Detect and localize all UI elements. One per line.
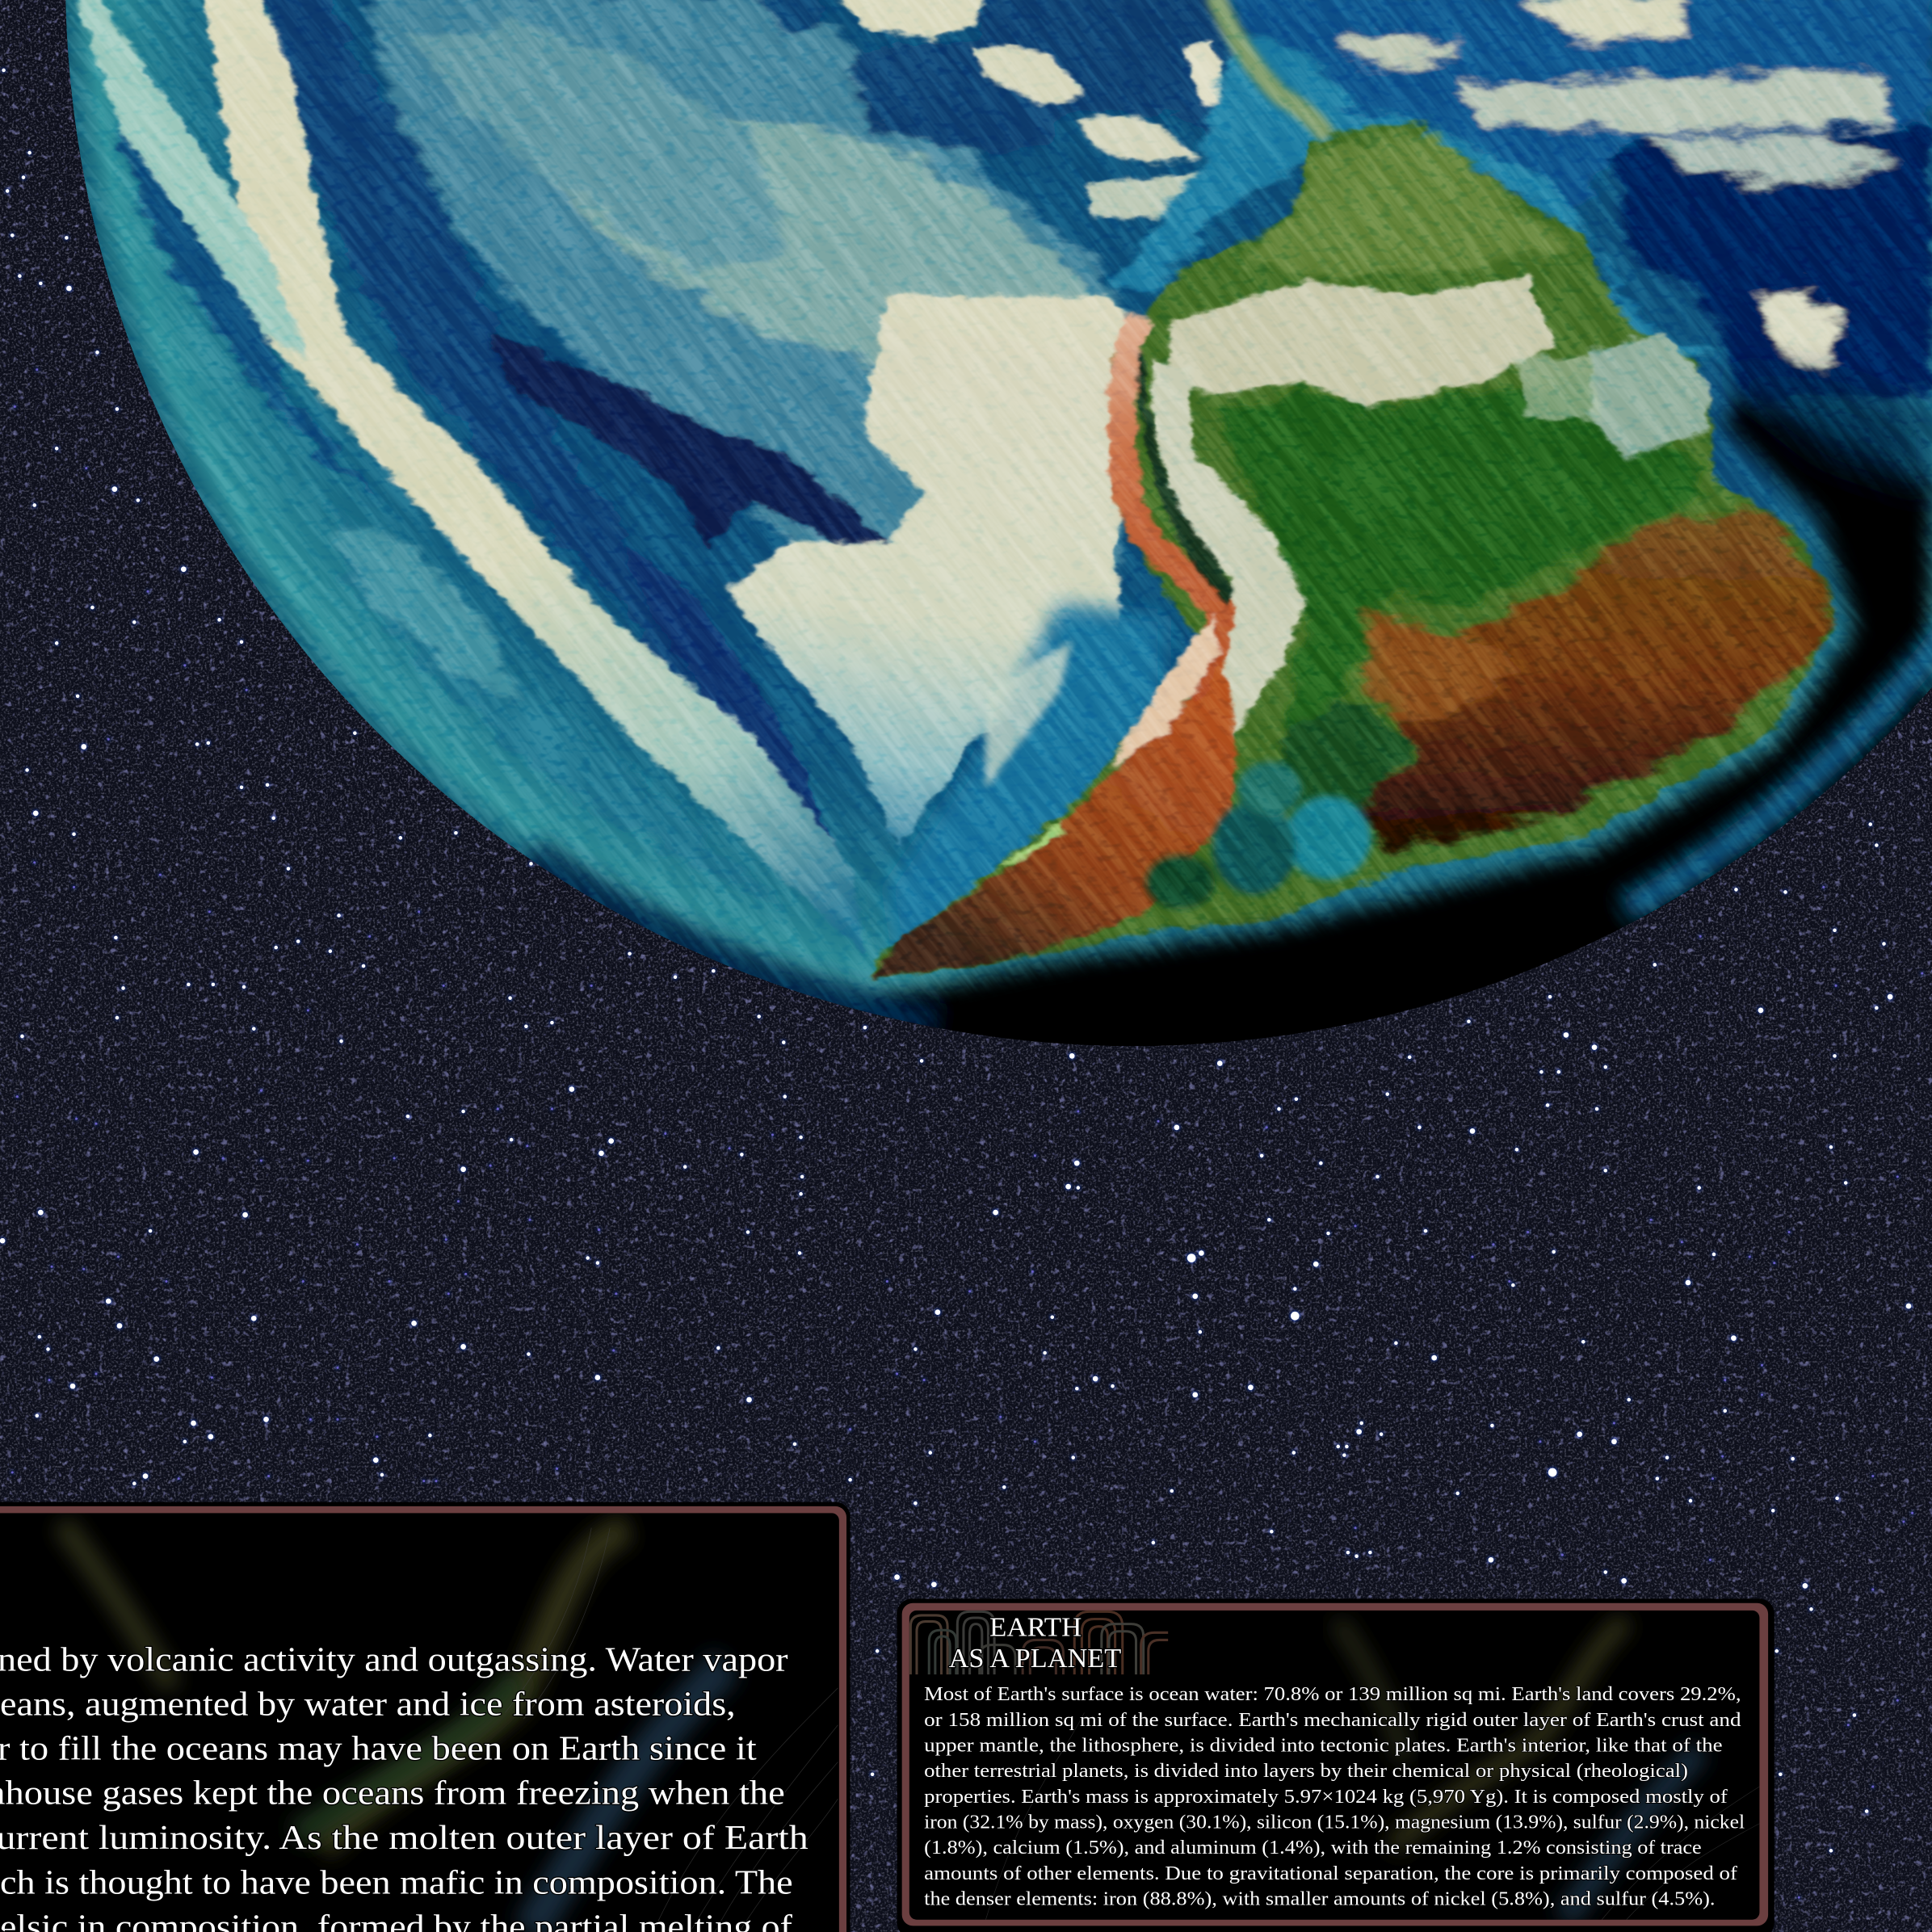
paragraph text: r to fill the oceans may have been on Earth since it — [0, 1730, 757, 1767]
panel: Earth as a planet — [897, 1598, 1774, 1932]
body text: amounts of other elements. Due to gravitational separation, the core is primarily composed of — [924, 1863, 1737, 1884]
paragraph text: ned by volcanic activity and outgassing. Water vapor — [0, 1642, 788, 1679]
lakes and teal blobs — [1146, 762, 1371, 909]
heading: EARTH — [989, 1611, 1082, 1642]
heading — [949, 1611, 1121, 1674]
heading: AS A PLANET — [949, 1643, 1121, 1674]
cream cloud swaths — [74, 0, 1233, 955]
Earth globe — [65, 0, 1932, 1046]
body text: iron (32.1% by mass), oxygen (30.1%), silicon (15.1%), magnesium (13.9%), sulfur (2.9%), nickel — [924, 1812, 1745, 1833]
paragraph text — [0, 1642, 808, 1932]
Central America — [1214, 0, 1328, 138]
body text: or 158 million sq mi of the surface. Earth's mechanically rigid outer layer of Earth's crust and — [924, 1710, 1741, 1731]
dark swirl — [488, 333, 890, 842]
clouds over the continent — [1152, 274, 1710, 739]
panel: early Earth text — [0, 1502, 850, 1932]
South America — [530, 124, 1932, 1109]
body text: (1.8%), calcium (1.5%), and aluminum (1.4%), with the remaining 1.2% consisting of trace — [924, 1838, 1702, 1858]
night side shadow — [530, 370, 1932, 1109]
body text: properties. Earth's mass is approximately 5.97×1024 kg (5,970 Yg). It is composed mostly of — [924, 1787, 1728, 1808]
aurora line texture — [985, 1620, 1759, 1920]
body text: the denser elements: iron (88.8%), with smaller amounts of nickel (5.8%), and sulfur (4.5%). — [924, 1888, 1716, 1909]
northern ocean and clouds — [1115, 0, 1932, 406]
paragraph text: ch is thought to have been mafic in composition. The — [0, 1864, 793, 1901]
ocean limb glow — [65, 0, 1932, 1046]
aurora line texture — [61, 1523, 838, 1932]
body text: upper mantle, the lithosphere, is divided into tectonic plates. Earth's interior, like that of the — [924, 1736, 1723, 1757]
body text: other terrestrial planets, is divided into layers by their chemical or physical (rheological) — [924, 1761, 1688, 1782]
paragraph text: nhouse gases kept the oceans from freezing when the — [0, 1774, 785, 1812]
Andes — [872, 318, 1236, 980]
paragraph text: eans, augmented by water and ice from asteroids, — [0, 1686, 736, 1724]
body text: Most of Earth's surface is ocean water: 70.8% or 139 million sq mi. Earth's land covers 29.2%, — [924, 1684, 1741, 1705]
decorative retro arches — [910, 1611, 1168, 1676]
body text — [924, 1684, 1745, 1909]
Pacific near the coast — [887, 604, 1165, 961]
cloud bands over the Pacific — [124, 0, 1233, 912]
paragraph text: urrent luminosity. As the molten outer layer of Earth — [0, 1820, 808, 1857]
